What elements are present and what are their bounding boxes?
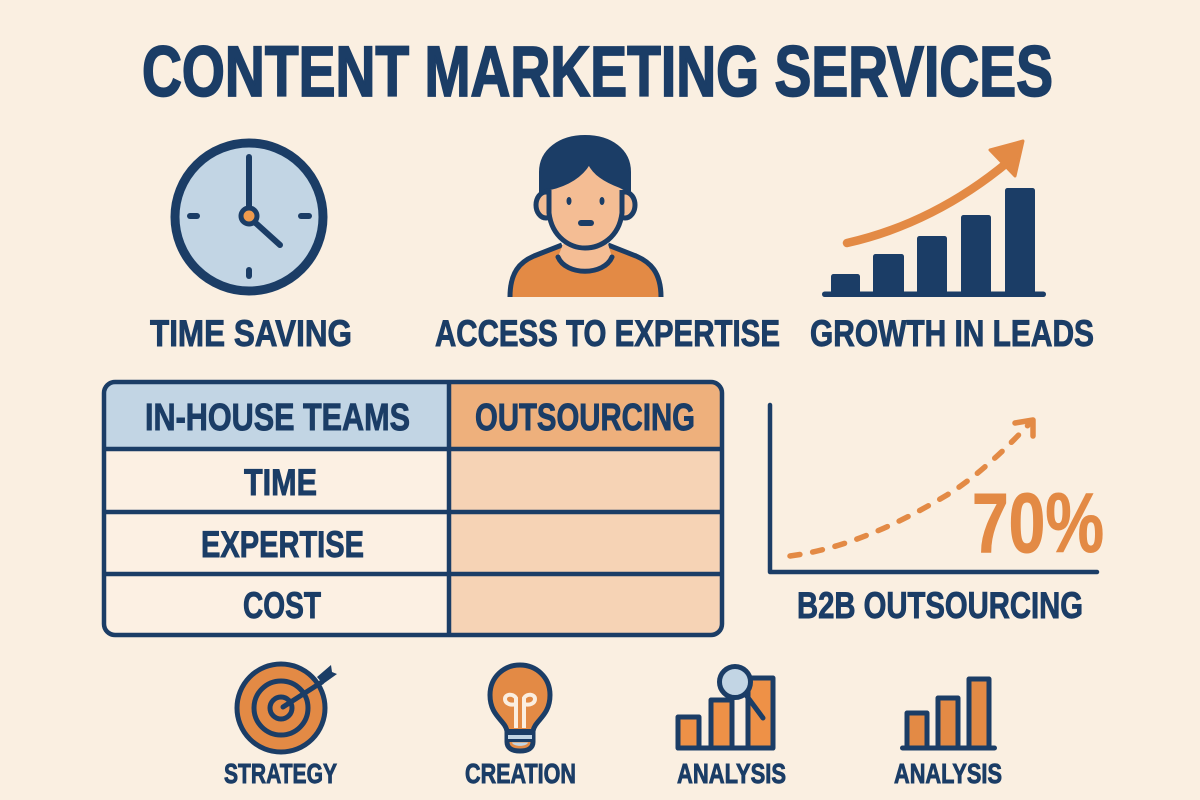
icon: bar chart with magnifier <box>676 666 775 750</box>
line chart: b2b outsourcing trend <box>770 405 1104 572</box>
label: access to expertise: ACCESS TO EXPERTISE <box>435 313 780 354</box>
comparison table: IN-HOUSE TEAMS <box>145 397 410 439</box>
comparison table: EXPERTISE <box>201 524 364 565</box>
comparison table <box>104 382 722 635</box>
label: creation: CREATION <box>465 758 576 789</box>
comparison table: TIME <box>244 462 317 503</box>
table header: in-house teams cell <box>104 382 449 449</box>
label: strategy: STRATEGY <box>224 758 337 789</box>
comparison table: COST <box>243 585 321 626</box>
label: analysis (first): ANALYSIS <box>677 758 786 789</box>
icon: growth bar chart with arrow <box>822 141 1046 297</box>
label: analysis (second): ANALYSIS <box>894 758 1002 789</box>
icon: bar chart <box>900 679 997 750</box>
table header: outsourcing cell <box>449 382 722 449</box>
stat: 70%: 70% <box>972 476 1104 570</box>
icon: clock <box>175 143 323 291</box>
icon: target with dart <box>237 664 337 752</box>
icon: light bulb <box>490 665 550 751</box>
label: time saving: TIME SAVING <box>150 313 352 354</box>
comparison table: OUTSOURCING <box>475 397 695 439</box>
label: growth in leads: GROWTH IN LEADS <box>810 313 1094 354</box>
icon: person <box>510 136 661 297</box>
label: b2b outsourcing: B2B OUTSOURCING <box>797 585 1083 626</box>
